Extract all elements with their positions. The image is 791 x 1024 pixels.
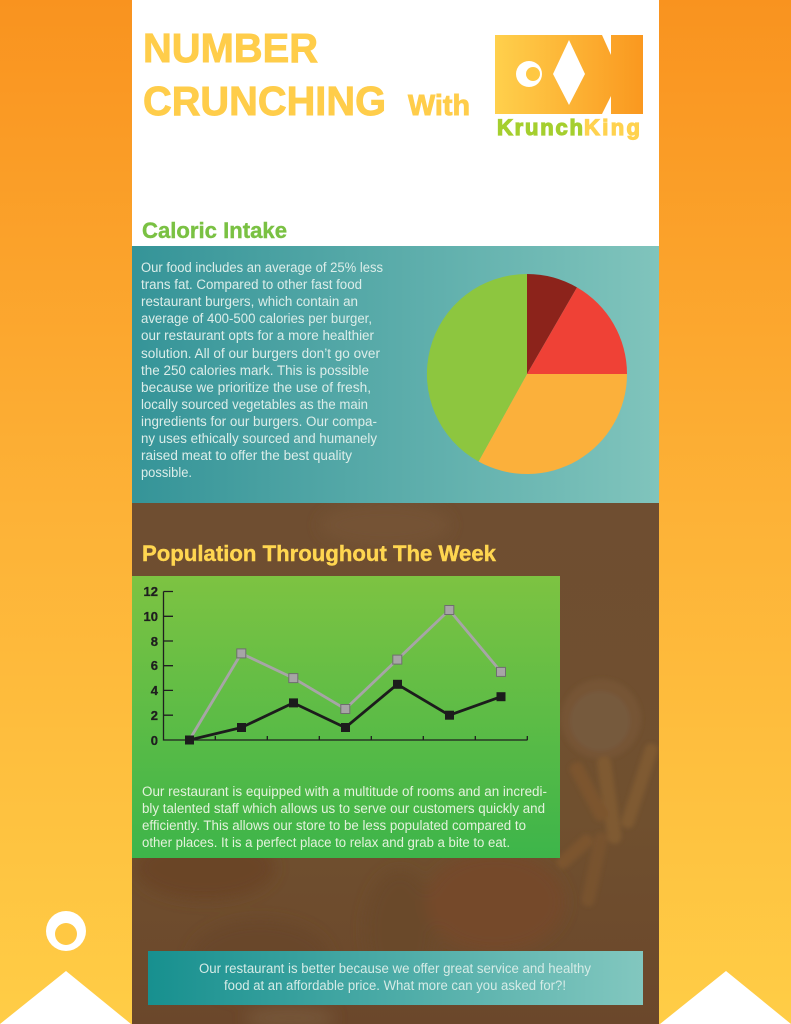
panel: population background with food photo xyxy=(132,503,659,1024)
y axis labels: 12 xyxy=(144,584,158,599)
caloric intake text block: solution. All of our burgers don’t go over xyxy=(141,346,380,361)
logo: KrunchKing: Krunch xyxy=(497,115,583,140)
caloric intake text block: because we prioritize the use of fresh, xyxy=(141,380,371,395)
title: CRUNCHING xyxy=(143,78,386,124)
y axis labels: 6 xyxy=(151,658,158,673)
heading: Population Throughout The Week: Population Throughout The Week xyxy=(142,541,497,566)
logo: KrunchKing xyxy=(495,35,643,140)
black data series xyxy=(185,680,506,744)
caloric intake text block: average of 400-500 calories per burger, xyxy=(141,311,372,326)
panel: caloric intake xyxy=(132,246,659,503)
heading: Caloric Intake: Caloric Intake xyxy=(142,218,287,243)
panel: population chart xyxy=(132,576,560,858)
population text block: other places. It is a perfect place to relax and grab a bite to eat. xyxy=(142,835,510,850)
population text block xyxy=(142,784,547,850)
logo: KrunchKing: King xyxy=(584,115,640,140)
caloric intake text block: ingredients for our burgers. Our compa- xyxy=(141,414,377,429)
y axis labels: 8 xyxy=(151,634,158,649)
caloric intake text block: Our food includes an average of 25% less xyxy=(141,260,383,275)
icon: left decorative ring xyxy=(46,911,86,951)
y axis labels: 2 xyxy=(151,708,158,723)
icon: right white triangle xyxy=(660,971,791,1024)
caloric intake text block: ny uses ethically sourced and humanely xyxy=(141,431,377,446)
caloric intake text block: restaurant burgers, which contain an xyxy=(141,294,358,309)
caloric intake text block: the 250 calories mark. This is possible xyxy=(141,363,369,378)
header panel xyxy=(132,0,659,246)
y axis labels: 4 xyxy=(151,683,159,698)
population text block: bly talented staff which allows us to serve our customers quickly and xyxy=(142,801,545,816)
title: NUMBER xyxy=(143,25,318,71)
line chart xyxy=(144,584,528,748)
caloric intake text block: raised meat to offer the best quality xyxy=(141,448,352,463)
y axis labels xyxy=(144,584,159,748)
caloric intake text block: trans fat. Compared to other fast food xyxy=(141,277,362,292)
y axis labels: 0 xyxy=(151,733,158,748)
callout: closing statement xyxy=(148,951,643,1005)
callout: closing statement: Our restaurant is better because we offer great service and healthy xyxy=(199,961,591,976)
title: With xyxy=(408,90,470,122)
caloric intake text block: our restaurant opts for a more healthier xyxy=(141,328,374,343)
callout: closing statement: food at an affordable price. What more can you asked for?! xyxy=(224,978,566,993)
grey data series xyxy=(189,606,506,740)
pie chart xyxy=(427,274,627,474)
icon: left white triangle xyxy=(0,971,131,1024)
title xyxy=(143,25,470,124)
caloric intake text block: locally sourced vegetables as the main xyxy=(141,397,368,412)
caloric intake text block xyxy=(141,260,383,480)
population text block: Our restaurant is equipped with a multitude of rooms and an incredi- xyxy=(142,784,547,799)
chart axes xyxy=(164,592,528,740)
caloric intake text block: possible. xyxy=(141,465,192,480)
population text block: efficiently. This allows our store to be less populated compared to xyxy=(142,818,526,833)
y axis labels: 10 xyxy=(144,609,158,624)
